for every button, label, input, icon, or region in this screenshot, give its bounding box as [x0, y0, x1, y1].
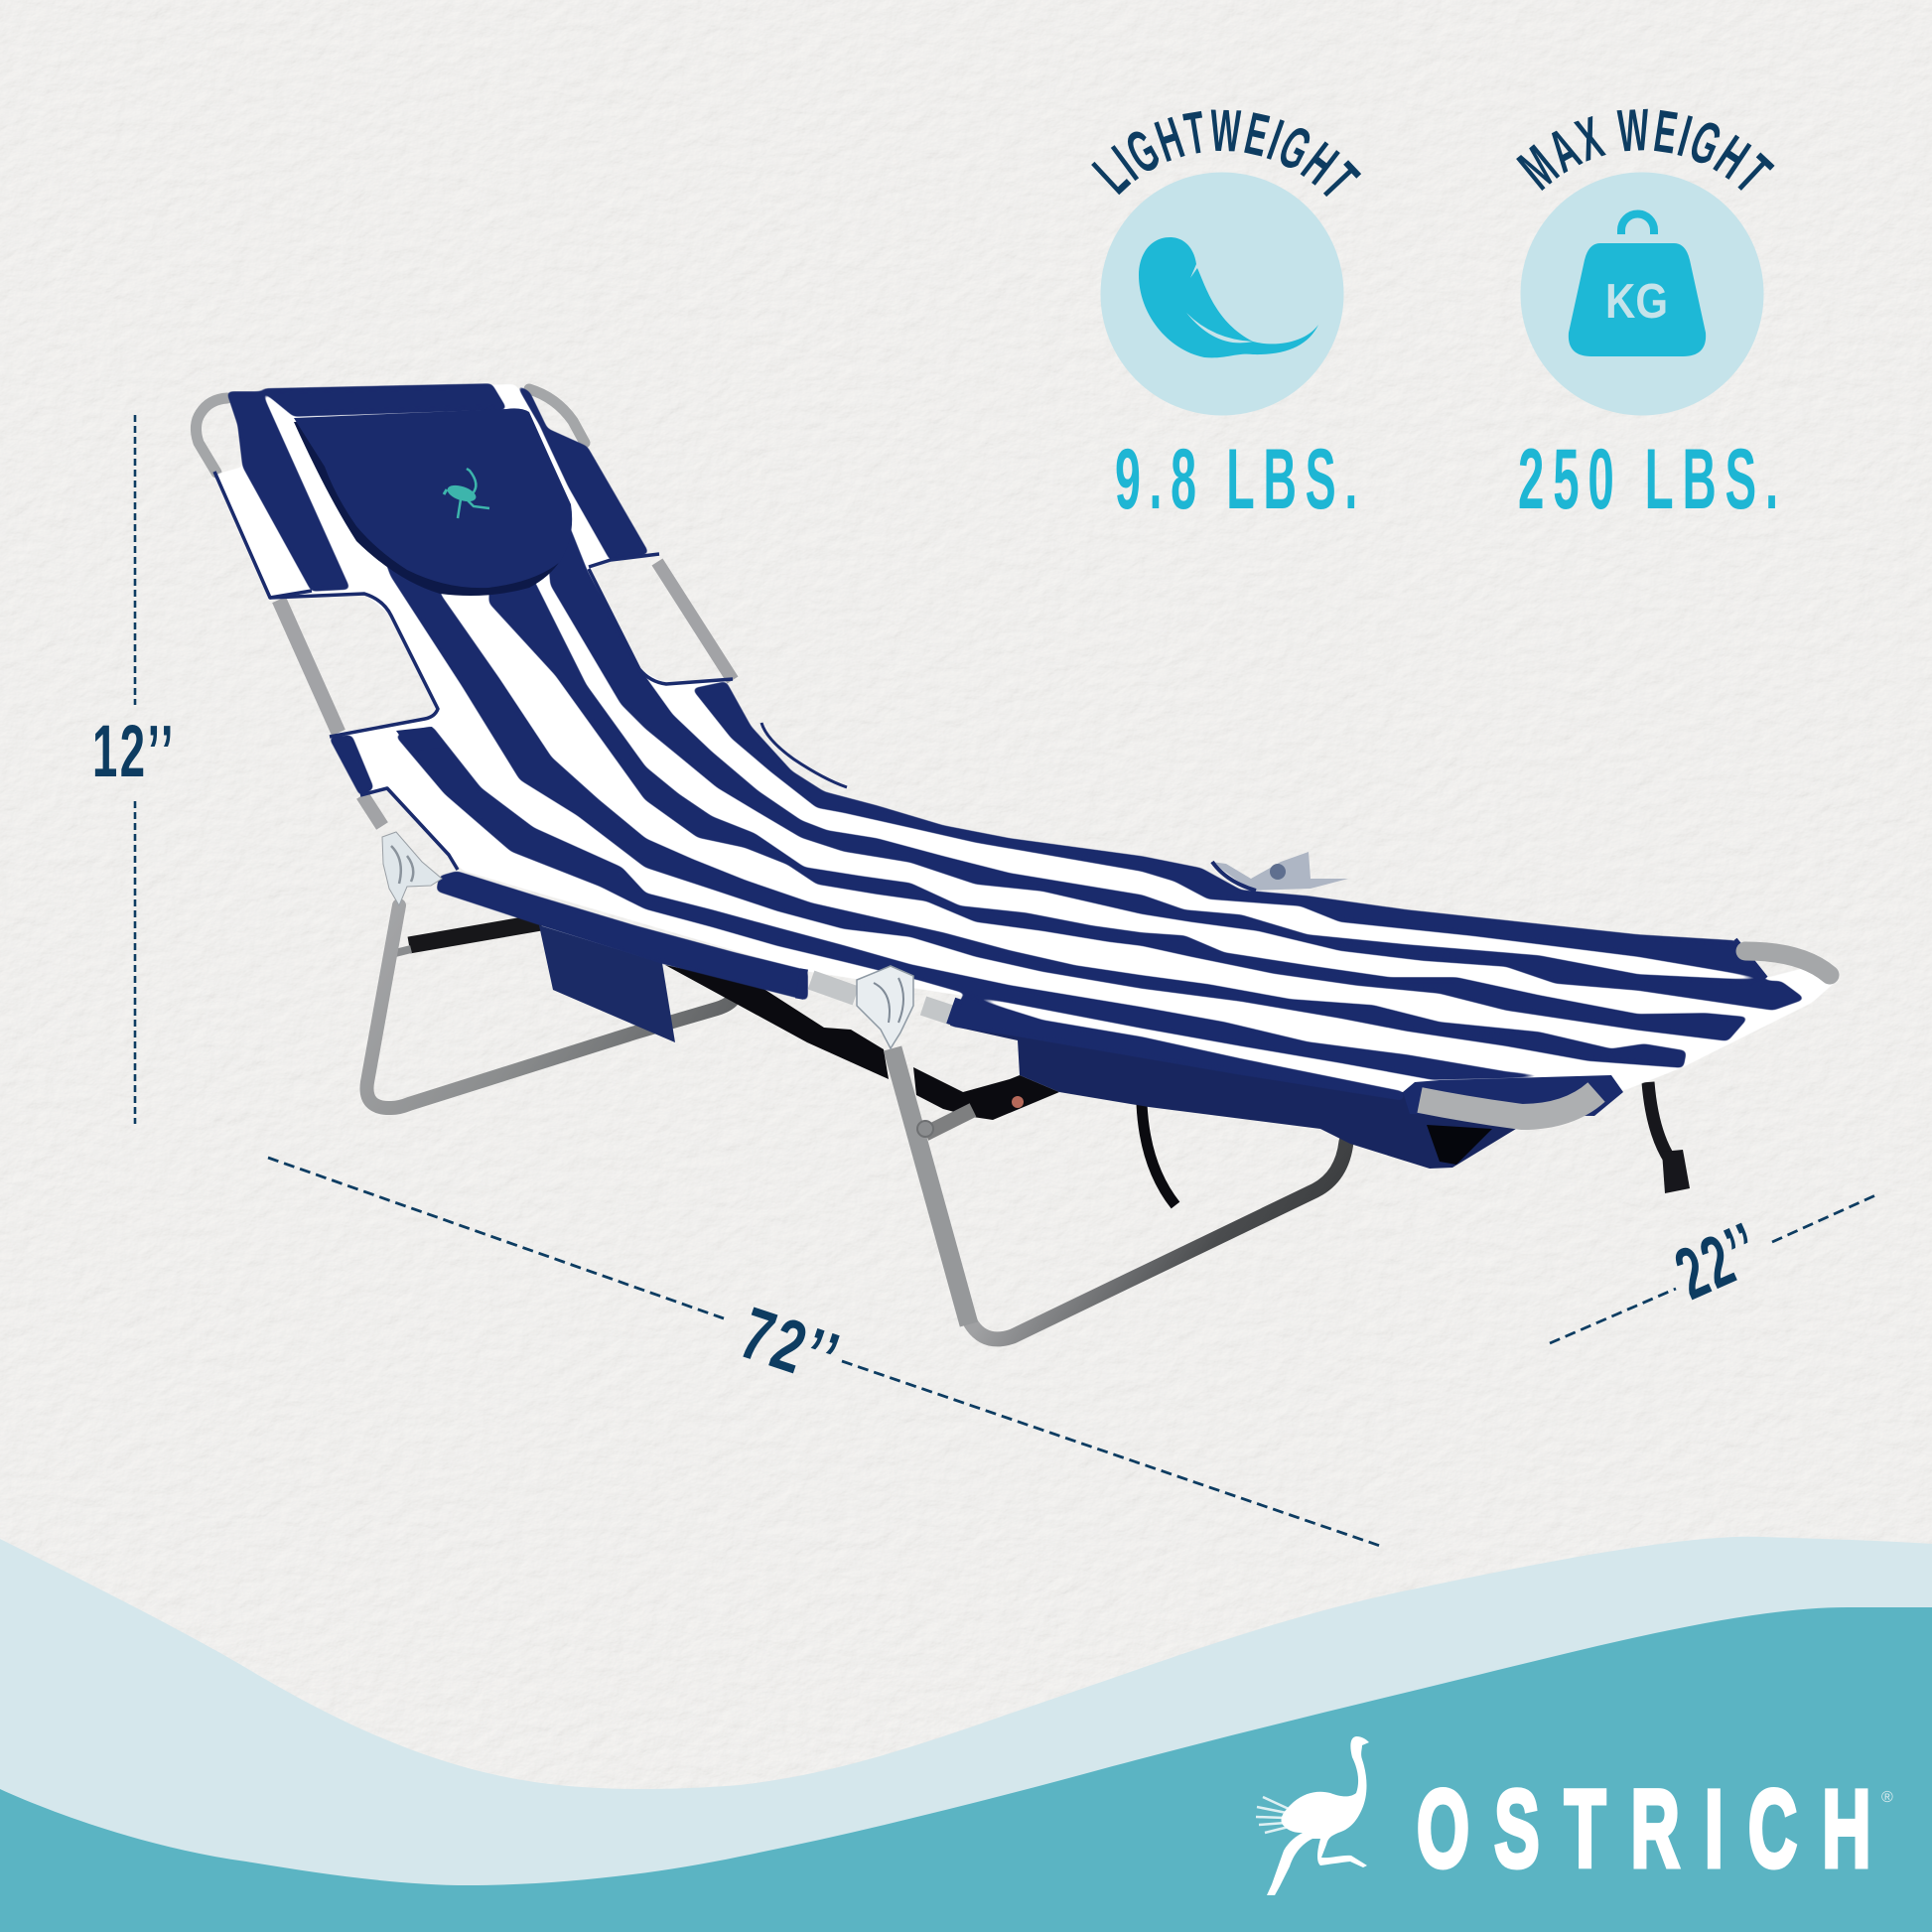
- fabric piping: [214, 472, 733, 870]
- hanging strap right with buckle: [1648, 1082, 1690, 1193]
- dimension: height 12 inches: 12’’: [92, 710, 176, 792]
- stripe four: [382, 551, 1686, 1067]
- head pillow: [294, 408, 572, 596]
- logo wordmark: OSTRICH: [1417, 1768, 1896, 1890]
- front band left: [437, 872, 807, 1000]
- head left band: [227, 392, 349, 591]
- ostrich emblem on pillow: [444, 469, 489, 518]
- arc guide lightweight: [1118, 151, 1345, 222]
- side clip on fabric edge: [1211, 852, 1348, 891]
- stat: max weight: [1516, 109, 1787, 527]
- hanging strap left: [1142, 1104, 1175, 1205]
- icon: kettlebell weight: [1569, 214, 1706, 356]
- dimension: width 22 inches: 22’’: [1664, 1206, 1773, 1315]
- icon: feather: [1139, 237, 1318, 357]
- logo: Ostrich: [1256, 1736, 1896, 1895]
- stripe five: [396, 727, 1611, 1079]
- dimension: width 22 inches: [1550, 1195, 1875, 1343]
- stat: lightweight: [1091, 109, 1366, 527]
- registered mark: ®: [1881, 1789, 1893, 1806]
- top clip on fabric edge: [761, 723, 847, 787]
- side rails: [279, 562, 733, 826]
- rear leg frame: [367, 905, 732, 1108]
- storage pocket: [539, 925, 675, 1042]
- dimension: length 72 inches: [268, 1158, 1380, 1546]
- curved heading max weight: MAX WEIGHT: [1516, 109, 1775, 191]
- circle: [1100, 173, 1344, 415]
- front band right: [950, 996, 1403, 1100]
- stripe back edge: [693, 682, 1766, 978]
- logo ostrich bird: [1256, 1736, 1369, 1895]
- teal wave: [0, 1607, 1932, 1932]
- foot corner tube: [1735, 939, 1830, 978]
- foot end cap and tube: [1403, 1075, 1623, 1117]
- upper joint: [382, 832, 442, 905]
- stripe two: [546, 526, 1804, 1010]
- chair: beach lounger: [196, 384, 1838, 1339]
- circle: [1521, 173, 1763, 415]
- top head tube frame: [196, 389, 585, 473]
- head right band: [517, 385, 648, 560]
- lower left patch: [330, 736, 373, 795]
- icon: kettlebell weight: KG: [1605, 275, 1668, 329]
- foot sling pocket: [950, 996, 1516, 1169]
- black straps under seat: [665, 965, 1059, 1120]
- curved heading lightweight: LIGHTWEIGHT: [1091, 109, 1362, 197]
- front joint: [799, 966, 959, 1048]
- front leg frame: [893, 1048, 1346, 1339]
- navy stripes on fabric: [227, 384, 1804, 1100]
- stripe three: [489, 556, 1747, 1040]
- stripe five head cap: [396, 727, 447, 752]
- head top band: [261, 384, 506, 416]
- value 9.8 lbs: 9.8 LBS.: [1115, 432, 1366, 527]
- fabric white base: [214, 384, 1838, 1092]
- dimension: length 72 inches: 72’’: [731, 1291, 851, 1401]
- light blue wave: [0, 1537, 1932, 1932]
- arc guide max weight: [1541, 151, 1766, 222]
